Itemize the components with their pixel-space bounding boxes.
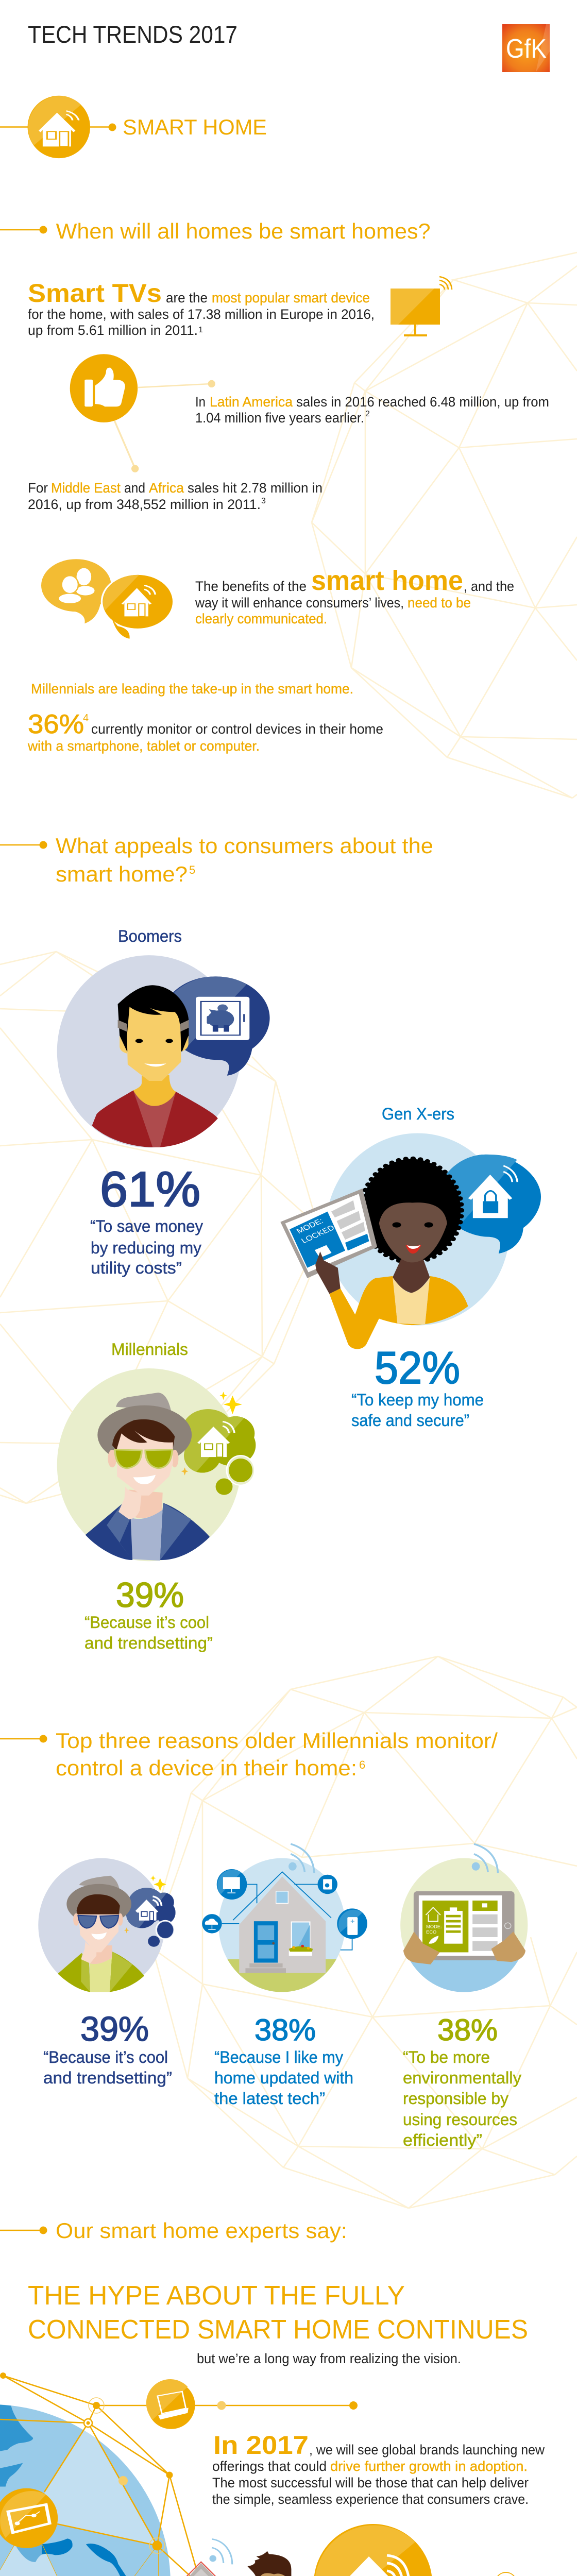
illustration: Gen X-er with tablet and lock bubble: MODE: xyxy=(295,1217,325,1235)
headline: the hype: THE HYPE ABOUT THE FULLY xyxy=(28,2281,405,2311)
stat: Boomers 61 percent xyxy=(90,1162,203,1277)
heading: top three reasons: Top three reasons older Millennials monitor/ xyxy=(56,1728,498,1753)
stat: 36 percent: 36% xyxy=(28,709,84,739)
illustration: Boomer with piggy bank bubble xyxy=(57,955,270,1148)
heading: top three reasons xyxy=(0,1728,498,1780)
icon: smart TV xyxy=(391,277,452,335)
text block: in 2017: The most successful will be those that can help deliver xyxy=(212,2475,529,2490)
icon: VR headset xyxy=(0,2488,58,2548)
GfK logo: GfK xyxy=(506,34,547,64)
text block: Latin America xyxy=(195,394,549,426)
text block: Middle East and Africa: Africa xyxy=(149,480,184,496)
text block: Latin America: Latin America xyxy=(210,394,293,410)
stat: Millennials 39 percent: and trendsetting” xyxy=(84,1634,213,1652)
text block: benefits of the smart home: smart home xyxy=(311,565,463,596)
stat: cool and trendsetting 39 percent: and trendsetting” xyxy=(43,2069,172,2087)
text block: smart TVs: 1 xyxy=(198,326,203,334)
illustration: cool and trendsetting millennial xyxy=(38,1858,178,1992)
heading: top three reasons: control a device in their home: xyxy=(56,1756,357,1780)
icon: speech bubbles xyxy=(41,559,175,639)
stat: updated with latest tech 38 percent: “Because I like my xyxy=(214,2048,343,2066)
stat: updated with latest tech 38 percent: the latest tech” xyxy=(214,2089,325,2108)
text block: smart TVs: most popular smart device xyxy=(212,290,370,306)
subheading: but we’re a long way from realizing the vision. xyxy=(197,2351,461,2366)
stat: Boomers 61 percent: by reducing my xyxy=(91,1239,201,1257)
text block: benefits of the smart home: way it will enhance consumers’ lives, xyxy=(195,595,404,611)
connection network lines xyxy=(0,2376,495,2576)
illustration: smart house xyxy=(132,2539,252,2576)
text block: Middle East and Africa: Middle East xyxy=(51,480,121,496)
stat: cool and trendsetting 39 percent: 39% xyxy=(80,2010,149,2048)
stat: cool and trendsetting 39 percent xyxy=(43,2010,172,2087)
icon: thumbs up with connectors xyxy=(70,354,215,472)
stat: Gen X-ers 52 percent: “To keep my home xyxy=(351,1391,484,1409)
text block: smart TVs: up from 5.61 million in 2011. xyxy=(28,323,198,338)
text block: smart TVs: Smart TVs xyxy=(28,279,162,308)
illustration: eco mode tablet: MODE: xyxy=(426,1924,442,1929)
text block: Middle East and Africa: sales hit 2.78 million in xyxy=(188,480,323,496)
text block: in 2017: the simple, seamless experience that consumers crave. xyxy=(212,2492,529,2507)
text block: benefits of the smart home: The benefits of the xyxy=(195,579,307,594)
text block: in 2017: offerings that could xyxy=(212,2459,327,2474)
text block: millennials leading: Millennials are leading the take-up in the smart home. xyxy=(31,681,353,697)
text block: Middle East and Africa: 2016, up from 348,552 million in 2011. xyxy=(28,497,261,512)
title: TECH TRENDS 2017 xyxy=(28,21,237,48)
illustration: eco mode tablet xyxy=(400,1844,528,1992)
text block: benefits of the smart home: , and the xyxy=(464,579,514,594)
illustration: eco mode tablet: ECO xyxy=(426,1930,436,1935)
icon: laptop xyxy=(146,2379,195,2429)
stat: Boomers 61 percent: utility costs” xyxy=(91,1259,182,1277)
illustration: globe with continents xyxy=(0,2401,183,2576)
text block: Middle East and Africa xyxy=(28,480,323,512)
stat: Gen X-ers 52 percent: safe and secure” xyxy=(351,1411,469,1430)
illustration: man holding tablet xyxy=(224,2551,332,2576)
text block: benefits of the smart home xyxy=(195,565,514,626)
stat: updated with latest tech 38 percent: 38% xyxy=(254,2013,316,2047)
illustration: Gen X-er with tablet and lock bubble: LOCKED xyxy=(300,1224,336,1245)
text block: smart TVs: are the xyxy=(166,290,208,306)
text block: smart TVs: for the home, with sales of 17.38 million in Europe in 2016, xyxy=(28,307,375,322)
stat: Millennials 39 percent: 39% xyxy=(116,1575,184,1615)
heading: what appeals to consumers xyxy=(0,834,433,886)
illustration: Gen X-er with tablet and lock bubble xyxy=(280,1133,541,1349)
text block: Latin America: 1.04 million five years earlier. xyxy=(195,410,364,426)
stat: environmentally responsible 38 percent: using resources xyxy=(403,2110,517,2129)
stat: updated with latest tech 38 percent: home updated with xyxy=(214,2069,353,2087)
text block: Latin America: sales in 2016 reached 6.48 million, up from xyxy=(296,394,549,410)
illustration: Millennial with hat and thought cloud xyxy=(57,1368,258,1561)
text block: in 2017: In 2017 xyxy=(213,2431,309,2460)
heading: what appeals to consumers: What appeals to consumers about the xyxy=(56,834,433,858)
stat: 36 percent: currently monitor or control devices in their home xyxy=(91,721,383,737)
stat: environmentally responsible 38 percent: responsible by xyxy=(403,2089,508,2108)
illustration: big smart home icon xyxy=(314,2524,432,2576)
stat: Millennials 39 percent: “Because it’s cool xyxy=(84,1613,209,1632)
stat: cool and trendsetting 39 percent: “Because it’s cool xyxy=(43,2048,168,2066)
stat: environmentally responsible 38 percent: 38% xyxy=(437,2013,498,2047)
text block: Latin America: In xyxy=(195,394,206,410)
text block: Middle East and Africa: 3 xyxy=(261,497,266,505)
GfK logo xyxy=(502,24,550,72)
text block: in 2017: , we will see global brands launching new xyxy=(309,2442,545,2458)
stat: Gen X-ers 52 percent: 52% xyxy=(375,1342,460,1393)
text block: in 2017 xyxy=(212,2431,545,2507)
headline: the hype: CONNECTED SMART HOME CONTINUES xyxy=(28,2315,528,2345)
label: Gen X-ers: Gen X-ers xyxy=(382,1105,454,1123)
section banner: smart home: SMART HOME xyxy=(123,115,267,139)
headline: the hype xyxy=(28,2281,528,2345)
stat: environmentally responsible 38 percent: environmentally xyxy=(403,2069,521,2087)
heading: what appeals to consumers: 5 xyxy=(189,863,195,876)
stat: Boomers 61 percent: “To save money xyxy=(90,1217,203,1235)
stat: Gen X-ers 52 percent xyxy=(351,1342,484,1430)
stat: 36 percent: with a smartphone, tablet or computer. xyxy=(27,738,260,754)
heading: top three reasons: 6 xyxy=(359,1758,365,1771)
stat: environmentally responsible 38 percent xyxy=(403,2013,521,2149)
stat: updated with latest tech 38 percent xyxy=(214,2013,353,2108)
text block: Latin America: 2 xyxy=(365,410,370,418)
text block: benefits of the smart home: clearly communicated. xyxy=(195,611,327,626)
stat: environmentally responsible 38 percent: efficiently” xyxy=(403,2131,482,2149)
heading: our smart home experts say: Our smart home experts say: xyxy=(56,2218,347,2243)
heading: what appeals to consumers: smart home? xyxy=(56,862,188,886)
text block: Middle East and Africa: and xyxy=(124,480,145,496)
text block: Middle East and Africa: For xyxy=(28,480,48,496)
illustration: connected house xyxy=(202,1844,367,1992)
section banner: smart home xyxy=(0,96,267,158)
text block: benefits of the smart home: need to be xyxy=(408,595,471,611)
label: Boomers: Boomers xyxy=(118,927,182,945)
stat: environmentally responsible 38 percent: “To be more xyxy=(403,2048,490,2066)
stat: 36 percent: 4 xyxy=(83,713,89,724)
stat: Boomers 61 percent: 61% xyxy=(100,1162,200,1217)
stat: Millennials 39 percent xyxy=(84,1575,213,1652)
stat: 36 percent xyxy=(27,709,383,754)
label: Millennials: Millennials xyxy=(111,1340,188,1359)
heading: when will all homes be smart homes: When will all homes be smart homes? xyxy=(56,219,431,243)
text block: in 2017: drive further growth in adoption. xyxy=(330,2459,528,2474)
text block: smart TVs xyxy=(28,279,375,338)
icon: network nodes xyxy=(0,2372,517,2576)
